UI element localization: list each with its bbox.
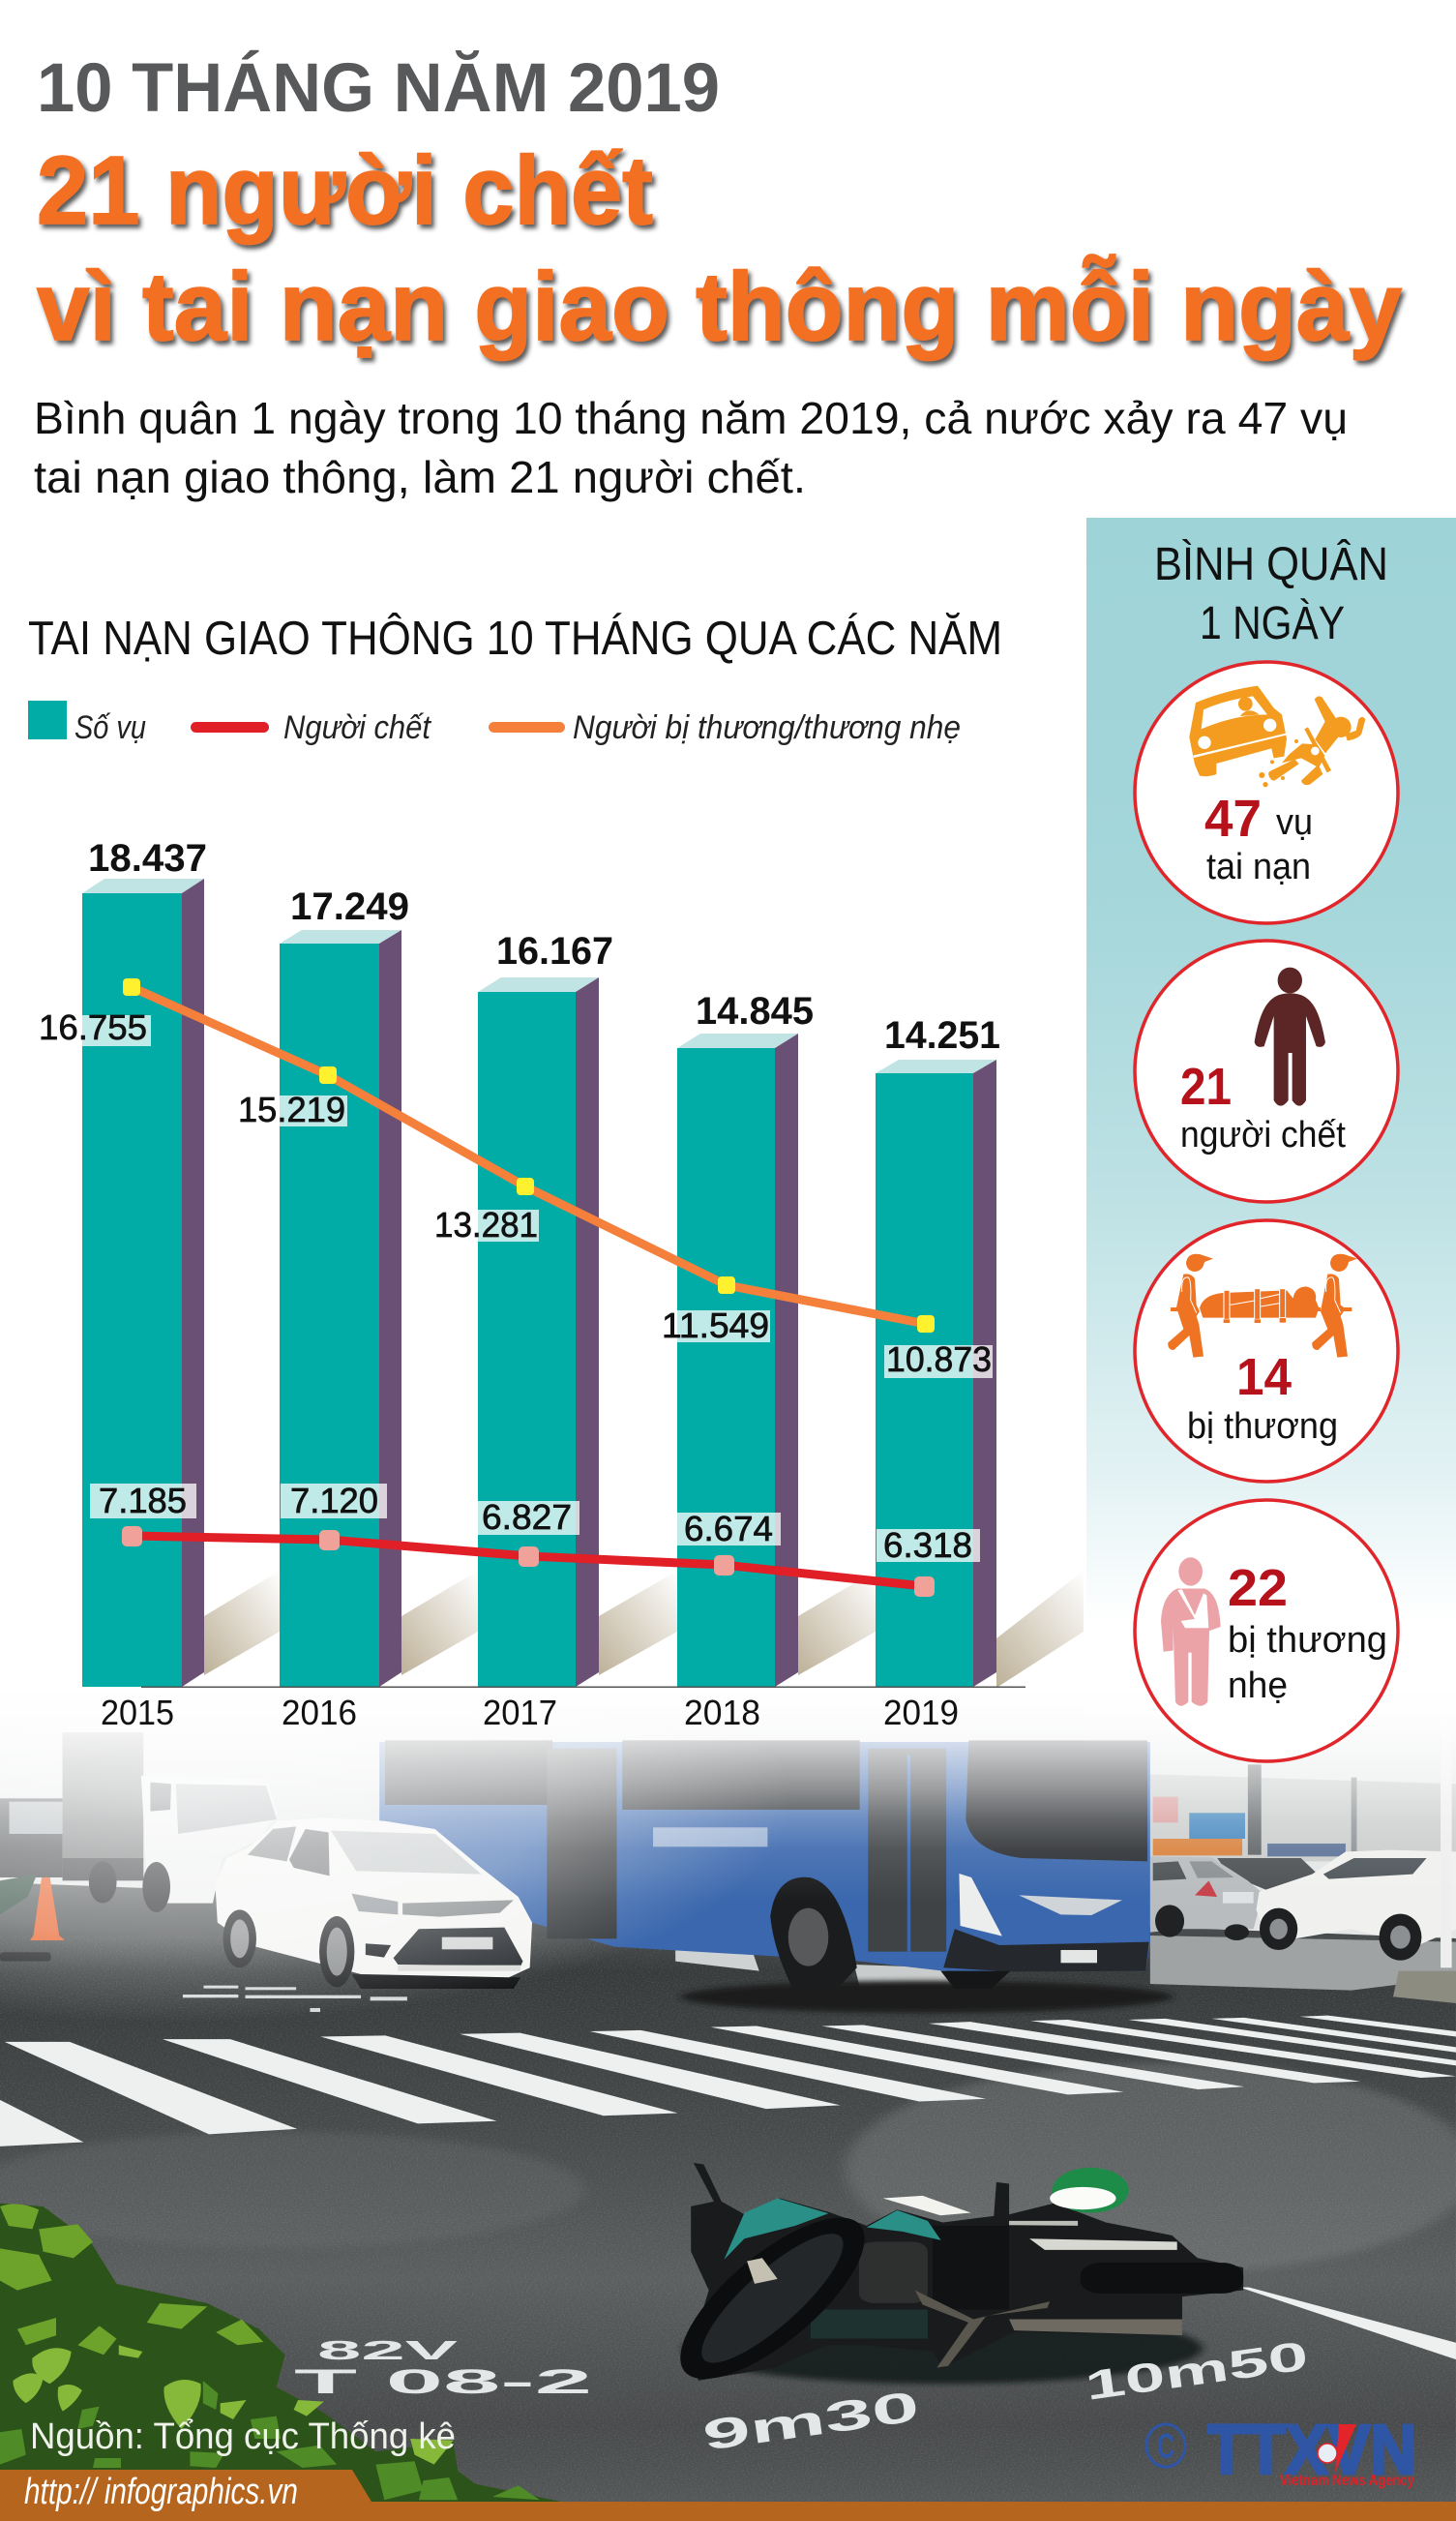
year labels: 2017 bbox=[483, 1693, 557, 1732]
footer bar bbox=[0, 2470, 1456, 2521]
white car bbox=[215, 1817, 532, 1989]
logo: TTXVN: TTXVN bbox=[1207, 2412, 1416, 2489]
year labels: 2015 bbox=[101, 1693, 174, 1732]
background photo: road accident scene bbox=[0, 1577, 1456, 2521]
crosswalk stripes bbox=[0, 2016, 1456, 2359]
bar value labels: 18.437 bbox=[88, 837, 207, 880]
circle: accidents bbox=[1135, 662, 1398, 923]
silver car bbox=[1150, 1856, 1263, 1940]
label: vụ tai nạn bbox=[1206, 802, 1313, 887]
bright road under bus bbox=[675, 1948, 759, 1971]
chart heading: TAI NẠN GIAO THÔNG 10 THÁNG QUA CÁC NĂM bbox=[28, 613, 1002, 665]
chalk marks on road: 10m50 bbox=[1083, 2332, 1311, 2409]
chalk dashes near car bbox=[183, 1986, 407, 2012]
data labels: 6.318 bbox=[883, 1525, 972, 1565]
year labels: 2019 bbox=[883, 1693, 959, 1732]
chalk marks on road bbox=[294, 2332, 1311, 2460]
dark car bbox=[1217, 1858, 1318, 1890]
axis line bbox=[141, 1686, 1025, 1688]
bar value labels: 14.251 bbox=[884, 1014, 1000, 1057]
bar 2017 bbox=[478, 977, 599, 1687]
data label backgrounds bbox=[39, 1015, 993, 1562]
year labels bbox=[101, 1693, 959, 1732]
bus bbox=[379, 1740, 1150, 1989]
data labels: 7.185 bbox=[99, 1481, 187, 1520]
tyre rear bbox=[1081, 2263, 1243, 2294]
logo: TTXVN: Vietnam News Agency bbox=[1280, 2473, 1414, 2489]
bar 2016 bbox=[280, 930, 401, 1687]
panel heading bbox=[1154, 539, 1388, 649]
figure: 14: 14 bbox=[1236, 1348, 1292, 1406]
person at left edge bbox=[0, 1875, 37, 1914]
panel heading: 1 NGÀY bbox=[1200, 598, 1345, 649]
data labels: 6.827 bbox=[482, 1497, 572, 1537]
deaths line markers bbox=[122, 1526, 935, 1597]
circle: injured bbox=[1135, 1220, 1398, 1482]
chart legend: Người bị thương/thương nhẹ bbox=[573, 709, 961, 746]
bar 2015 bbox=[82, 879, 204, 1687]
title: headline: 21 người chết bbox=[37, 136, 653, 245]
traffic cone bbox=[30, 1877, 65, 1940]
circle: minor injuries bbox=[1135, 1500, 1398, 1761]
chart legend bbox=[28, 701, 961, 746]
data labels: 13.281 bbox=[434, 1205, 538, 1245]
data labels: 15.219 bbox=[238, 1090, 345, 1129]
bar value labels bbox=[88, 837, 1000, 1057]
white SUV bbox=[1257, 1850, 1456, 1961]
title: period: 10 THÁNG NĂM 2019 bbox=[37, 50, 720, 127]
title: headline: vì tai nạn giao thông mỗi ngày bbox=[37, 253, 1402, 361]
intro paragraph: Bình quân 1 ngày trong 10 tháng năm 2019, cả nước xảy ra 47 vụ bbox=[34, 393, 1348, 443]
windshield bbox=[966, 1740, 1147, 1861]
shadow below bus bbox=[681, 1981, 1173, 2013]
motorcycle on its side bbox=[647, 2163, 1243, 2395]
data labels: 6.674 bbox=[684, 1509, 773, 1548]
label: bị thương nhẹ: bị thương bbox=[1228, 1620, 1387, 1661]
bar chart bbox=[39, 837, 1084, 1732]
logo: TTXVN: C bbox=[1157, 2426, 1174, 2466]
data labels bbox=[39, 1007, 992, 1565]
data labels: 7.120 bbox=[290, 1481, 378, 1520]
left haze over traffic bbox=[0, 1577, 793, 2023]
label: bị thương nhẹ bbox=[1228, 1620, 1387, 1706]
footer url: http:// infographics.vn bbox=[24, 2472, 298, 2512]
injured line bbox=[132, 987, 926, 1324]
rear door bbox=[547, 1749, 617, 1938]
label: bị thương nhẹ: nhẹ bbox=[1228, 1666, 1288, 1706]
background street, right side bbox=[379, 1723, 1456, 2013]
panel heading: BÌNH QUÂN bbox=[1154, 539, 1388, 590]
bar value labels: 16.167 bbox=[496, 930, 613, 973]
left traffic and white car bbox=[0, 1732, 532, 2012]
icon: car hitting motorbike bbox=[1189, 686, 1365, 787]
truck bbox=[63, 1732, 278, 1912]
circle: deaths bbox=[1135, 941, 1398, 1202]
panel: daily average bbox=[1086, 518, 1456, 1761]
bar value labels: 14.845 bbox=[696, 990, 814, 1033]
bush bbox=[0, 2204, 561, 2502]
source note: Nguồn: Tổng cục Thống kê bbox=[30, 2416, 456, 2457]
figure: 22: 22 bbox=[1228, 1559, 1288, 1617]
bar value labels: 17.249 bbox=[290, 885, 409, 928]
data labels: 16.755 bbox=[39, 1007, 147, 1047]
injured line markers bbox=[123, 978, 935, 1333]
chalk marks on road: T 08-2 bbox=[294, 2363, 592, 2401]
figure: 47: 47 bbox=[1204, 790, 1262, 848]
icon: stretcher bearers bbox=[1168, 1254, 1357, 1358]
bar 2019 bbox=[876, 1060, 996, 1687]
left van bbox=[0, 1798, 63, 1877]
fairing teal bbox=[724, 2199, 828, 2260]
icon: person bbox=[1255, 968, 1325, 1106]
front door bbox=[868, 1749, 946, 1952]
bar shadows bbox=[204, 1571, 1084, 1688]
figure: 21: 21 bbox=[1180, 1058, 1232, 1116]
intro paragraph: tai nạn giao thông, làm 21 người chết. bbox=[34, 452, 806, 502]
helmet bbox=[1053, 2168, 1129, 2213]
bar 2018 bbox=[677, 1034, 798, 1687]
chalk marks on road: 9m30 bbox=[700, 2383, 922, 2460]
bus wheels bbox=[770, 1877, 857, 1989]
chart legend: Số vụ bbox=[74, 709, 146, 746]
intro paragraph bbox=[34, 393, 1348, 502]
year labels: 2016 bbox=[282, 1693, 357, 1732]
title: headline bbox=[37, 136, 1402, 361]
data labels: 11.549 bbox=[662, 1306, 769, 1345]
road surface bbox=[0, 1882, 1456, 2521]
chalk marks on road: 82V bbox=[317, 2335, 459, 2365]
label: người chết: người chết bbox=[1180, 1115, 1346, 1155]
icon: person with arm sling bbox=[1161, 1557, 1221, 1706]
data labels: 10.873 bbox=[886, 1339, 992, 1379]
label: vụ tai nạn: tai nạn bbox=[1206, 847, 1311, 887]
bus bumper bbox=[943, 1929, 1149, 1971]
year labels: 2018 bbox=[684, 1693, 760, 1732]
label: bị thương: bị thương bbox=[1187, 1406, 1338, 1447]
deaths line bbox=[132, 1536, 924, 1586]
label: vụ tai nạn: vụ bbox=[1276, 802, 1313, 843]
bus side windows bbox=[385, 1740, 860, 1810]
top white fade of photo bbox=[0, 1689, 1456, 1906]
chart legend: Người chết bbox=[283, 709, 431, 746]
